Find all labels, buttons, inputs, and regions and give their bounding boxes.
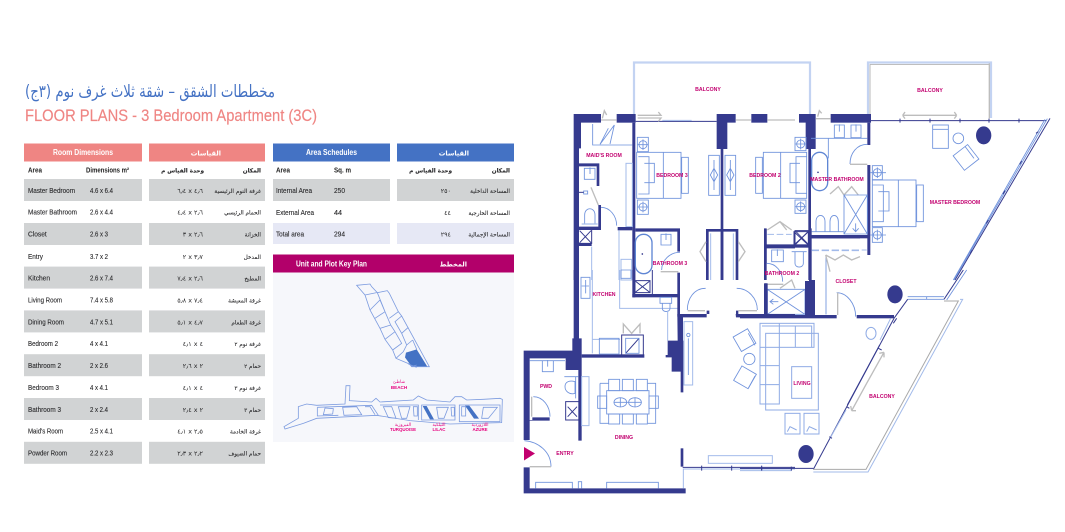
title: English heading: FLOOR PLANS - 3 Bedroom Apartment (3C): [25, 106, 317, 125]
panel: area schedules table: Total area: [276, 230, 305, 238]
panel: room dimensions table in Arabic: غرفة نوم ٢: [234, 342, 261, 348]
panel: room dimensions table in Arabic: المطبخ: [244, 276, 261, 282]
panel: room dimensions table: Dimensions m²: [86, 166, 129, 174]
panel: room dimensions table in Arabic: ٤ x ٤٫١: [183, 340, 203, 348]
panel: room dimensions table: Living Room: [28, 296, 62, 304]
panel: room dimensions table: Bedroom 3: [28, 383, 59, 392]
panel: area schedules table: [273, 144, 390, 244]
panel: room dimensions table: [24, 144, 142, 464]
north-east zone: bedroom 2, master bathroom, master bedroom: [790, 63, 1050, 280]
panel: room dimensions table: Bathroom 2: [28, 361, 61, 370]
floor plan: [524, 62, 1050, 493]
panel: room dimensions table in Arabic: ٢٫٥ x ٤٫١: [177, 428, 204, 436]
panel: room dimensions table: 2.6 x 7.4: [90, 274, 113, 282]
panel: room dimensions table in Arabic: غرفة نوم ٣: [234, 386, 261, 392]
room label: master bathroom: MASTER BATHROOM: [810, 177, 864, 183]
room label: bedroom 3: BEDROOM 3: [656, 173, 688, 179]
panel: room dimensions table in Arabic: غرفة الخادمة: [230, 430, 261, 436]
panel: room dimensions table in Arabic: القياسات: [191, 150, 221, 158]
panel: room dimensions table in Arabic: المدخل: [244, 255, 261, 261]
room label: bathroom 2: BATHROOM 2: [765, 271, 799, 277]
panel: room dimensions table: Area: [28, 166, 43, 174]
room label: entry: ENTRY: [556, 451, 574, 457]
panel: room dimensions table in Arabic: ٢ x ٢٫٤: [183, 406, 204, 414]
panel: area schedules table in Arabic: [397, 144, 514, 244]
key plan: turquoise Arabic label: الفيروزية: [395, 423, 411, 428]
panel: area schedules table in Arabic: المكان: [492, 168, 510, 174]
panel: area schedules table in Arabic: القياسات: [439, 150, 469, 158]
key plan: lilac label: LILAC: [433, 427, 446, 432]
key plan: site plan: [284, 386, 502, 429]
panel: room dimensions table: Powder Room: [28, 448, 67, 458]
key plan: beach Arabic label: شاطئ: [393, 380, 405, 385]
panel: room dimensions table in Arabic: الخزانة: [245, 232, 261, 238]
panel: room dimensions table: Master Bedroom: [28, 186, 75, 195]
key plan: azure Arabic label: اللازوردية: [471, 423, 489, 428]
panel: area schedules table in Arabic: المساحة الداخلية: [470, 189, 510, 195]
panel: unit and plot key plan: [273, 254, 514, 442]
lower zone: kitchen, powder room, entry, dining: [524, 270, 795, 493]
central zone: bathroom 2, closet: [764, 222, 860, 317]
panel: room dimensions table: 4 x 4.1: [90, 339, 108, 348]
room label: dining: DINING: [615, 435, 633, 441]
room label: master bedroom: MASTER BEDROOM: [930, 200, 980, 206]
panel: room dimensions table in Arabic: ٣٫٧ x ٢: [183, 253, 204, 261]
panel: room dimensions table: Room Dimensions: [53, 148, 113, 157]
panel: room dimensions table in Arabic: غرفة الطعام: [231, 320, 261, 326]
panel: room dimensions table: 2.5 x 4.1: [90, 426, 113, 436]
panel: room dimensions table: Master Bathroom: [28, 208, 77, 216]
panel: room dimensions table: Kitchen: [28, 274, 50, 282]
panel: area schedules table in Arabic: وحدة القياس م: [409, 168, 452, 174]
room label: balcony upper right: BALCONY: [917, 88, 943, 94]
panel: room dimensions table: Maid's Room: [28, 426, 63, 436]
panel: area schedules table: 250: [334, 186, 345, 195]
panel: room dimensions table in Arabic: [149, 144, 265, 464]
panel: room dimensions table in Arabic: ٤٫٧ x ٥٫١: [177, 318, 204, 326]
panel: room dimensions table in Arabic: ٤٫٦ x ٦٫٤: [177, 187, 204, 195]
room label: living: LIVING: [793, 381, 811, 387]
key plan: turquoise label: TURQUOISE: [390, 427, 416, 432]
panel: room dimensions table: Bathroom 3: [28, 405, 61, 414]
room label: bedroom 2: BEDROOM 2: [749, 173, 781, 179]
panel: room dimensions table: 7.4 x 5.8: [90, 296, 113, 304]
key plan: azure label: AZURE: [472, 427, 488, 432]
room label: powder room: PWD: [540, 384, 552, 390]
key plan: beach label: BEACH: [391, 385, 408, 390]
panel: unit and plot key plan: Unit and Plot Key Plan: [296, 260, 367, 268]
panel: area schedules table: Sq. m: [334, 166, 351, 174]
room label: closet: CLOSET: [835, 279, 857, 285]
panel: room dimensions table in Arabic: ٢٫٦ x ٧٫٤: [177, 274, 204, 282]
key plan: tower outline: [357, 284, 429, 367]
panel: room dimensions table: 2.6 x 4.4: [90, 208, 113, 216]
panel: room dimensions table in Arabic: غرفة المعيشة: [228, 298, 261, 304]
key plan: lilac Arabic label: الليلكية: [433, 422, 445, 428]
panel: room dimensions table: 2 x 2.4: [90, 405, 108, 414]
north-west zone: maid's room, bedroom 3, bathroom 3: [574, 111, 807, 280]
panel: area schedules table in Arabic: المساحة الإجمالية: [468, 232, 510, 238]
entry arrow: [524, 447, 535, 460]
room label: bathroom 3: BATHROOM 3: [653, 261, 687, 267]
panel: room dimensions table: 4.6 x 6.4: [90, 186, 113, 195]
panel: room dimensions table in Arabic: حمام ٣: [244, 408, 261, 414]
panel: room dimensions table in Arabic: حمام ٢: [244, 364, 261, 370]
balconies outlines: [634, 62, 991, 118]
panel: room dimensions table in Arabic: ٢٫٦ x ٣: [183, 230, 204, 238]
panel: room dimensions table in Arabic: ٤ x ٤٫١: [183, 384, 203, 392]
panel: area schedules table: External Area: [276, 208, 315, 217]
panel: area schedules table: Area: [276, 166, 291, 174]
panel: room dimensions table: 3.7 x 2: [90, 252, 108, 261]
panel: room dimensions table in Arabic: وحدة القياس م: [161, 168, 204, 174]
panel: room dimensions table in Arabic: ٢٫٢ x ٢٫٣: [177, 450, 204, 458]
panel: room dimensions table in Arabic: ٢٫٦ x ٤٫٤: [177, 208, 204, 216]
panel: area schedules table in Arabic: ٢٩٤: [441, 230, 451, 238]
panel: room dimensions table in Arabic: ٧٫٤ x ٥٫٨: [177, 296, 203, 304]
panel: area schedules table: Internal Area: [276, 186, 313, 195]
panel: room dimensions table: Entry: [28, 252, 43, 261]
panel: area schedules table in Arabic: ٢٥٠: [441, 187, 451, 195]
panel: room dimensions table: Closet: [28, 230, 47, 238]
panel: room dimensions table: 2.2 x 2.3: [90, 448, 113, 458]
title: Arabic heading: مخططات الشقق – شقة ثلاث غرف نوم (٣ج): [25, 82, 275, 102]
panel: room dimensions table in Arabic: حمام الضيوف: [228, 452, 261, 458]
south-east zone: living room, balcony: [740, 270, 967, 472]
room label: maid's room: MAID'S ROOM: [586, 153, 622, 159]
panel: room dimensions table: Bedroom 2: [28, 339, 58, 348]
panel: room dimensions table: 4 x 4.1: [90, 383, 108, 392]
panel: unit and plot key plan: المخطط: [440, 260, 467, 268]
panel: room dimensions table: 4.7 x 5.1: [90, 318, 113, 326]
panel: room dimensions table in Arabic: غرفة النوم الرئيسية: [214, 189, 261, 195]
panel: area schedules table in Arabic: ٤٤: [444, 209, 451, 217]
panel: room dimensions table: Dining Room: [28, 318, 64, 326]
room label: balcony lower: BALCONY: [869, 394, 895, 400]
panel: room dimensions table in Arabic: المكان: [243, 168, 261, 174]
panel: area schedules table: Area Schedules: [306, 148, 357, 157]
panel: area schedules table: 294: [334, 230, 345, 238]
panel: area schedules table: 44: [334, 208, 342, 217]
panel: room dimensions table in Arabic: ٢ x ٢٫٦: [183, 362, 204, 370]
panel: room dimensions table: 2.6 x 3: [90, 230, 108, 238]
panel: room dimensions table in Arabic: الحمام الرئيسي: [224, 210, 261, 216]
panel: area schedules table in Arabic: المساحة الخارجية: [468, 211, 510, 217]
panel: room dimensions table: 2 x 2.6: [90, 361, 108, 370]
room label: balcony: BALCONY: [695, 87, 721, 93]
room label: kitchen: KITCHEN: [592, 292, 616, 298]
